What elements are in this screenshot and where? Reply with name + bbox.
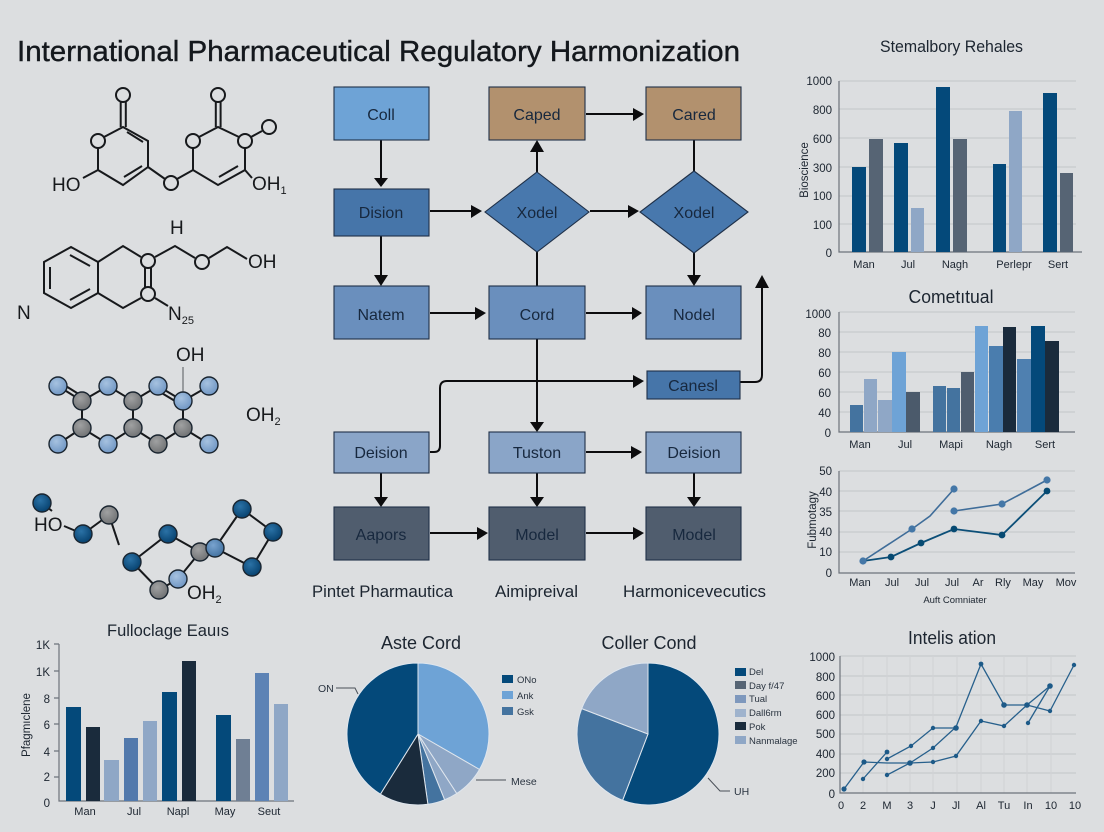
bar chart: Cometıtual: [805, 287, 1075, 451]
bar chart: Cometıtual: 80: [818, 328, 831, 340]
x axis title: Auft Comniater: [923, 595, 987, 606]
bar chart: Cometıtual: 60: [818, 368, 831, 380]
bar chart: Stemalbory Rehales: [799, 38, 1082, 271]
line chart: Fubmotagy: Ar: [972, 577, 984, 589]
pie chart: Coller Cond: [577, 633, 798, 805]
line chart: Intelis ation: 10: [1069, 800, 1081, 812]
legend: Nanmalage: [749, 736, 798, 747]
bar chart: Cometıtual: 1000: [805, 309, 831, 321]
molecule 3: ball and stick lattice: [49, 345, 281, 453]
line chart: Intelis ation: M: [882, 800, 892, 812]
box: Aapors: Aapors: [356, 527, 406, 544]
callout: ON: ON: [318, 683, 334, 695]
bar chart: Cometıtual: Man: [849, 439, 871, 451]
legend: Gsk: [517, 707, 534, 718]
chart title: Fulloclage Eauıs: [107, 621, 229, 640]
box: Deision left: Deision: [354, 445, 408, 462]
y axis title: Bioscience: [799, 142, 811, 198]
title: International Pharmaceutical Regulatory Harmonization: [17, 36, 740, 68]
box: Cared: Cared: [672, 107, 716, 124]
molecule 3: ball and stick lattice: 2: [274, 416, 281, 428]
line chart: Fubmotagy: 50: [819, 466, 832, 478]
box: Deision left: [334, 432, 429, 473]
molecule 2: fused rings with chain: OH: [248, 252, 276, 273]
diamond: Xodel right: [640, 171, 748, 253]
bar chart: Fulloclage Eauıs: 2: [44, 772, 50, 784]
line chart: Intelis ation: 600: [816, 710, 835, 722]
box: Coll: [334, 87, 429, 140]
diamond: Xodel right: Xodel: [674, 205, 714, 222]
line chart: Fubmotagy: 10: [819, 547, 832, 559]
bar chart: Stemalbory Rehales: 100: [813, 220, 832, 232]
chart title: Coller Cond: [601, 633, 697, 653]
chart title: Cometıtual: [908, 287, 994, 307]
molecule 4: ball and stick chain: OH: [187, 583, 216, 604]
legend: Dall6rm: [749, 708, 782, 719]
bar chart: Cometıtual: Mapi: [939, 439, 963, 451]
line chart: Fubmotagy: Rly: [995, 577, 1011, 589]
box: Dision: [334, 189, 429, 236]
molecule 1: two oxygen rings: [52, 88, 287, 197]
bar chart: Cometıtual: 60: [818, 388, 831, 400]
line chart: Fubmotagy: 0: [826, 568, 832, 580]
line chart: Fubmotagy: May: [1023, 577, 1044, 589]
molecule 4: ball and stick chain: [33, 494, 282, 606]
box: Caped: [489, 87, 585, 140]
molecule 4: ball and stick chain: HO: [34, 515, 62, 536]
chart title: Stemalbory Rehales: [880, 38, 1023, 56]
bar chart: Stemalbory Rehales: 1000: [806, 76, 832, 88]
box: Natem: Natem: [357, 307, 405, 324]
bar chart: Fulloclage Eauıs: Man: [74, 806, 96, 818]
line chart: Intelis ation: Tu: [998, 800, 1010, 812]
bar chart: Stemalbory Rehales: Sert: [1048, 259, 1068, 271]
box: Natem: [334, 286, 429, 339]
bar chart: Stemalbory Rehales: 600: [813, 134, 832, 146]
flowchart: [334, 87, 769, 560]
line chart: Intelis ation: 2: [860, 800, 866, 812]
molecule 2: fused rings with chain: 25: [182, 315, 194, 327]
line chart: Fubmotagy: Man: [849, 577, 871, 589]
bar chart: Fulloclage Eauıs: 8: [44, 694, 50, 706]
line chart: Fubmotagy: 40: [819, 487, 832, 499]
bar chart: Fulloclage Eauıs: 0: [44, 798, 50, 810]
molecule 4: ball and stick chain: 2: [216, 594, 222, 606]
caption: Aimipreival: Aimipreival: [495, 582, 578, 601]
bar chart: Stemalbory Rehales: 300: [813, 163, 832, 175]
callout: Mese: [476, 776, 537, 788]
box: Tuston: Tuston: [513, 445, 561, 462]
box: Tuston: [489, 432, 585, 473]
line chart: Fubmotagy: 35: [819, 507, 832, 519]
box: Model centre: Model: [515, 527, 559, 544]
box: Model right: [646, 507, 741, 560]
line chart: Intelis ation: 0: [838, 800, 844, 812]
bar chart: Fulloclage Eauıs: Seut: [258, 806, 280, 818]
box: Canesl: [647, 371, 740, 399]
flow arrows: [374, 108, 769, 540]
line chart: Intelis ation: 800: [816, 672, 835, 684]
bar chart: Fulloclage Eauıs: 1K: [36, 640, 50, 652]
molecule 1: two oxygen rings: HO: [52, 175, 80, 196]
legend: Day f/47: [749, 681, 784, 692]
line chart: Intelis ation: Al: [976, 800, 986, 812]
line chart: Intelis ation: 1000: [809, 652, 835, 664]
line chart: Intelis ation: 600: [816, 691, 835, 703]
box: Deision right: [646, 432, 741, 473]
caption: Pintet Pharmautica: Pintet Pharmautica: [312, 582, 454, 601]
molecule 2: fused rings with chain: [17, 218, 276, 327]
y axis title: Fubmotagy: [807, 491, 819, 549]
line chart: Intelis ation: In: [1023, 800, 1033, 812]
line chart: Intelis ation: 3: [907, 800, 913, 812]
bar chart: Cometıtual: Sert: [1035, 439, 1055, 451]
bar chart: Stemalbory Rehales: Jul: [901, 259, 915, 271]
bar chart: Cometıtual: 40: [818, 408, 831, 420]
caption: Harmonicevecutics: Harmonicevecutics: [623, 582, 766, 601]
box: Dision: Dision: [359, 205, 403, 222]
bar chart: Stemalbory Rehales: 800: [813, 105, 832, 117]
line chart: Intelis ation: 400: [816, 749, 835, 761]
chart title: Aste Cord: [381, 633, 461, 653]
bar chart: Cometıtual: Nagh: [986, 439, 1012, 451]
legend: Del: [749, 667, 763, 678]
chart title: Intelis ation: [908, 628, 996, 648]
box: Cord: Cord: [520, 307, 554, 324]
box: Aapors: [334, 507, 429, 560]
legend: Ank: [517, 691, 534, 702]
callout: UH: [708, 778, 749, 798]
y axis title: Pfagmıclene: [21, 693, 33, 757]
molecule 2: fused rings with chain: N: [168, 304, 182, 325]
diamond: Xodel left: Xodel: [517, 205, 557, 222]
line chart: Fubmotagy: Mov: [1056, 577, 1077, 589]
callout: ON: [318, 683, 358, 695]
line chart: Intelis ation: 200: [816, 768, 835, 780]
pie chart: Aste Cord: [318, 633, 537, 805]
bar chart: Fulloclage Eauıs: Jul: [127, 806, 141, 818]
legend: Tual: [749, 694, 767, 705]
legend: [735, 667, 798, 747]
line chart: Fubmotagy: 40: [819, 527, 832, 539]
box: Deision right: Deision: [667, 445, 721, 462]
box: Model centre: [489, 507, 585, 560]
bar chart: Fulloclage Eauıs: 6: [44, 720, 50, 732]
molecule 3: ball and stick lattice: OH: [246, 405, 274, 426]
box: Cared: [646, 87, 741, 140]
legend: ONo: [517, 675, 537, 686]
bar chart: Fulloclage Eauıs: [21, 621, 294, 818]
box: Cord: [489, 286, 585, 339]
bar chart: Stemalbory Rehales: Man: [853, 259, 875, 271]
line chart: Fubmotagy: Jul: [945, 577, 959, 589]
box: Nodel: [646, 286, 741, 339]
box: Caped: Caped: [513, 107, 561, 124]
bar chart: Fulloclage Eauıs: May: [215, 806, 236, 818]
molecule 3: ball and stick lattice: OH: [176, 345, 204, 366]
bar chart: Cometıtual: 80: [818, 348, 831, 360]
box: Coll: Coll: [367, 107, 395, 124]
bar chart: Stemalbory Rehales: 100: [813, 191, 832, 203]
line chart: Intelis ation: 500: [816, 729, 835, 741]
bar chart: Cometıtual: Jul: [898, 439, 912, 451]
line chart: Intelis ation: Jl: [952, 800, 960, 812]
line chart: Intelis ation: 10: [1045, 800, 1057, 812]
molecule 2: fused rings with chain: N: [17, 303, 31, 324]
bar chart: Fulloclage Eauıs: Napl: [167, 806, 189, 818]
bar chart: Fulloclage Eauıs: 4: [44, 747, 51, 759]
legend: [502, 675, 537, 718]
molecule 1: two oxygen rings: 1: [280, 185, 287, 197]
bar chart: Stemalbory Rehales: Nagh: [942, 259, 968, 271]
line chart: Intelis ation: J: [930, 800, 936, 812]
callout: UH: UH: [734, 786, 749, 798]
line chart: Intelis ation: [809, 628, 1081, 812]
bar chart: Stemalbory Rehales: 0: [826, 248, 832, 260]
box: Canesl: Canesl: [668, 378, 718, 395]
line chart: Fubmotagy: Jul: [915, 577, 929, 589]
legend: Pok: [749, 722, 766, 733]
bar chart: Cometıtual: 0: [825, 428, 831, 440]
line chart: Intelis ation: 0: [829, 789, 835, 801]
bar chart: Fulloclage Eauıs: 1K: [36, 667, 50, 679]
callout: Mese: Mese: [511, 776, 537, 788]
line chart: Fubmotagy: Jul: [885, 577, 899, 589]
box: Model right: Model: [672, 527, 716, 544]
box: Nodel: Nodel: [673, 307, 715, 324]
molecule 1: two oxygen rings: OH: [252, 174, 280, 195]
line chart: Fubmotagy: [807, 466, 1077, 606]
molecule 2: fused rings with chain: H: [170, 218, 184, 239]
bar chart: Stemalbory Rehales: Perlepr: [996, 259, 1032, 271]
diamond: Xodel left: [485, 172, 589, 252]
